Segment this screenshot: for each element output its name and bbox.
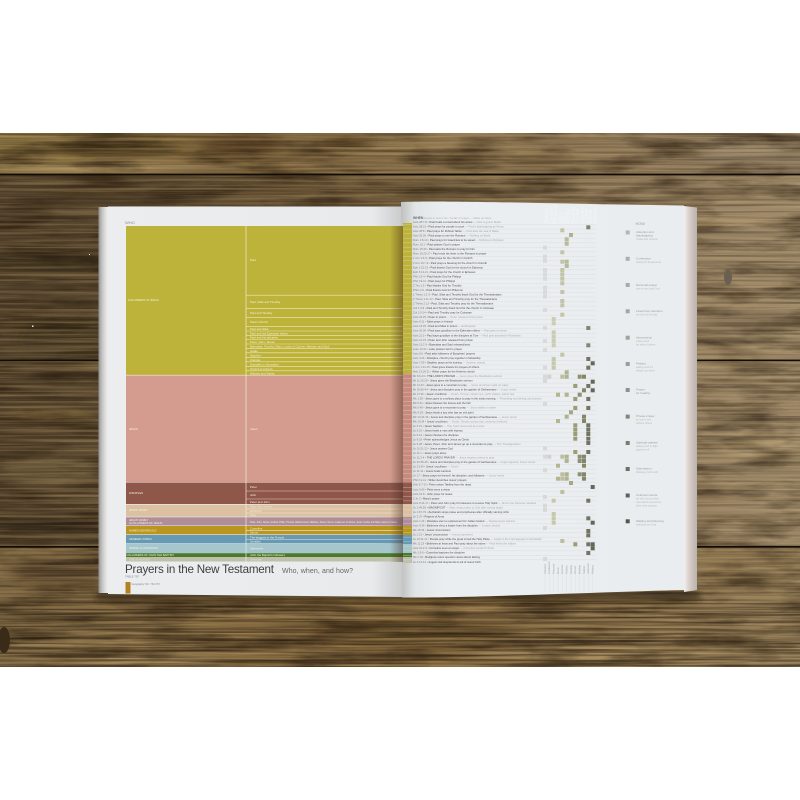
faint column headings: Private <box>575 208 581 224</box>
list rows: Acts 16:25 • Paul and Silas in prison — Earthquake <box>413 324 476 328</box>
faint column headings: Petition <box>566 207 572 224</box>
faint column headings: Fixed <box>558 212 564 224</box>
list rows: Lk 11:2-4 • THE LORD'S PRAYER — Jesus teaches others to pray <box>413 456 495 460</box>
faint column headings: Healing <box>571 207 577 224</box>
knot: right <box>724 269 732 285</box>
band: named individuals <box>126 526 403 534</box>
person labels: Sanhedrin <box>250 546 264 550</box>
faint column headings: Confess <box>549 205 555 224</box>
person labels: Unknown <box>250 557 262 561</box>
list rows: Jn 11:41 • Jesus heals Lazarus <box>413 469 452 473</box>
panel: when list <box>403 216 596 564</box>
person labels: Peter, John, James <box>250 340 275 344</box>
category labels: JESUS <box>129 427 138 431</box>
list rows: Acts 20:36 • Paul prays to see the Romans — Nothing on Earth <box>413 234 491 238</box>
person labels: Barnabas, Timothy, Mary, Lucius of Cyrene, Manaen and Saul <box>250 344 330 348</box>
person labels: Peter, John, James, Andrew, Philip, Thomas, Bartholomew, Matthew, James, Simon, Judas son of James, Jesus' mother and Mary, sisters of Jesus <box>250 520 397 524</box>
legend item: fixed-hour: set time of the day <box>636 312 658 316</box>
list rows: Mt 27:46 • Jesus' crucifixion — Death, Temple curtain rips, earth shakes, saints rise <box>413 392 515 396</box>
list rows: Lk 6:12 • Jesus chooses the disciples <box>413 433 459 437</box>
list rows: Lk 23:34 • Jesus' crucifixion — Death <box>413 465 459 469</box>
legend item: intercession <box>626 336 656 346</box>
list rows: Acts 28:15 • Paul prays for people in court — Paul's thanksgiving by Rome <box>413 224 504 228</box>
list rows: Lk 2:21 • Jesus' circumcision — Anna prophesies <box>413 533 474 537</box>
band: general public <box>126 535 403 543</box>
legend item: prayer for healing <box>626 388 650 395</box>
bottom plank grain <box>0 600 800 667</box>
list rows: Lk 10:21-22 • Jesus praises God <box>413 446 453 450</box>
left cover edge <box>98 207 108 593</box>
faint column headings: Personal <box>553 204 559 224</box>
list rows: Acts 6:6 • Paul asks followers of Epaphras' prayers <box>413 351 476 355</box>
list rows: Acts 8:14-17 • Peter and John pray for believers to receive Holy Spirit — Simon the Sorcerer rebuked <box>413 501 537 505</box>
rotated column labels: Fixed <box>556 567 560 574</box>
list rows <box>413 220 542 564</box>
list rows: Heb 13:18-21 • Writer prays for the Hebrew church <box>413 370 475 374</box>
list rows: Mk 11:25 • Believers at feast and Paul pray about the storm — Paul feeds the sailors <box>413 542 517 546</box>
legend item: unknown words: they were praying <box>636 504 657 508</box>
legend item: prayer for healing: for healing <box>636 391 650 395</box>
person labels: Paul and Timothy <box>250 311 273 315</box>
list rows: Phil 1:3-4 • Paul thanks God for Philippi <box>413 274 461 278</box>
band: Jesus' family <box>126 505 403 517</box>
legend item: unknown words: was said but we know <box>636 500 661 504</box>
list rows: Acts 14:23 • Peter and John released from prison <box>413 338 473 342</box>
list rows: Jn 17 • Jesus prays for himself, his disciples, and followers — Jesus' arrest <box>413 474 504 478</box>
person labels: Paul and his disciples <box>250 336 278 340</box>
faint column headings: Interc. <box>562 210 568 224</box>
legend item: submission: Submission <box>636 466 652 470</box>
list rows: Mk 14:32-39 • Jesus and disciples pray in the garden of Gethsemane — Jesus' arrest <box>413 415 517 419</box>
list rows: Lk 3:21 • Jesus' baptism — Holy Spirit descends as a dove <box>413 424 485 428</box>
legend item: private prayer: Private prayer <box>636 414 655 418</box>
legend item: confession: Confession <box>636 256 651 260</box>
legend item: confession <box>626 256 662 264</box>
list rows: Rom 15:30 • Paul asks the Romans to pray for him <box>413 247 476 251</box>
legend item: unknown words: Unknown words <box>636 493 658 497</box>
list rows: Acts 28:7-8 • Paul heals a crowd about his arrest — Paul is god in Malta <box>413 220 501 224</box>
list rows: Mt 14:23 • Jesus goes to a mountain to pray — Jesus and Peter walk on water <box>413 383 509 387</box>
right cover edge <box>684 206 697 592</box>
faint column headings: Submit <box>584 208 590 224</box>
title: Prayers in the New Testament <box>125 563 275 576</box>
legend item: petition <box>626 362 655 372</box>
colour strip matching who bands <box>403 223 412 563</box>
legend item: spiritual warfare: against evil <box>636 448 649 452</box>
person labels: Peter <box>250 485 257 489</box>
list rows: Acts 13:2-3 • Barnabas and Saul released/sent <box>413 342 470 346</box>
wood specks <box>32 254 90 327</box>
list rows: Phil 1:9-11 • Paul prays for Philippi <box>413 279 455 283</box>
list rows: 1 Thess 1:2-3 • Paul, Silas and Timothy thank God for the Thessalonians <box>413 292 502 296</box>
upper matrix squares <box>543 225 590 357</box>
list rows: Lk 2:37 • Prayers of Anna <box>413 514 445 518</box>
list rows: 2 Tim 1:3 • Paul thanks God for Timothy <box>413 283 462 287</box>
legend item: attention and thanksgiving: Attention and <box>636 230 654 234</box>
legend item: petition: asking God for <box>636 365 653 369</box>
category labels: NAMED INDIVIDUALS <box>129 528 157 532</box>
person labels: Paul <box>250 258 256 262</box>
legend item: waiting and listening: hearing from God <box>636 522 657 526</box>
category labels: ONE IN HEAVEN <box>129 557 150 561</box>
rotated column labels <box>543 560 594 574</box>
list rows: Acts 1:24 • Disciples elect a replacement for Judas Iscariot — Replacement elected <box>413 519 515 523</box>
person labels: Paul and the Ephesian elders <box>250 331 288 335</box>
list rows: Mk 2:18 • Religious rulers question Jesus about fasting <box>413 555 480 559</box>
rotated column labels: Healing <box>569 565 573 574</box>
legend item: intercession: for help of others <box>636 342 656 346</box>
heading: how: HOW <box>636 222 645 226</box>
wood stains <box>0 137 800 664</box>
band: unknown <box>126 557 403 562</box>
band: family and followers <box>126 517 403 526</box>
wood blotches <box>0 133 800 667</box>
rotated column labels: Private <box>573 565 577 574</box>
legend item: spiritual warfare <box>626 440 658 452</box>
rotated column labels: Interces. <box>560 564 564 574</box>
list rows: Acts 16:25 • Peter in prison — Peter released from prison <box>413 315 483 319</box>
band: Jewish authorities <box>126 544 403 553</box>
person labels: Disciples in Jerusalem <box>250 362 279 366</box>
person labels <box>250 258 397 561</box>
category labels: GENERAL PUBLIC <box>129 537 152 541</box>
list rows: Lk 1:67-79 • Zechariah sings praise and prophesies after officially naming John <box>413 510 509 514</box>
list rows: Col 1:9-14 • Paul and Timothy pray for Colossae <box>413 311 472 315</box>
list rows: Acts 10:2-3 • Cornelius sees an angel — Cornelius sends for Peter <box>413 546 494 550</box>
list rows: Rom 1:8-10 • Paul prays for Israel/Jew to be saved — Nothing on Romans <box>413 238 504 242</box>
legend item: attention and thanksgiving: praise and worship <box>636 237 658 241</box>
list rows: Eph 3:14-21 • Paul prays for the church in Ephesus <box>413 270 476 274</box>
category labels: FOLLOWERS OF JESUS <box>128 298 159 302</box>
list rows: Rom 16:25-27 • Paul ends his letter to the Romans in prayer <box>413 252 487 256</box>
row rules <box>413 224 596 564</box>
legend item: intercession: asking God <box>636 339 650 343</box>
faint column headings: Warfare <box>580 206 586 224</box>
list rows: Acts 21:5 • Paul says goodbye to the disciples at Tyre — Paul gets arrested in Ptolemais <box>413 333 521 337</box>
lower matrix squares <box>543 357 595 561</box>
list rows: Acts 28:8 • Paul prays for Publius' father — Paul asks the sea of Malta <box>413 229 499 233</box>
panel: who chart <box>125 220 403 562</box>
list rows: 2 Thess 1:11-12 • Paul, Silas and Timothy pray for the Thessalonians <box>413 297 498 301</box>
person labels: Mary and Joseph <box>250 504 273 508</box>
legend item: submission <box>626 466 658 474</box>
person labels: Paul's Church <box>250 320 268 324</box>
list rows: Mt 26:36-44 • Jesus and disciples pray in the garden of Gethsemane — Jesus' arrest <box>413 388 517 392</box>
heading: who: WHO <box>125 220 135 225</box>
gutter shading on chart <box>390 226 403 562</box>
open book <box>98 201 697 598</box>
legend item: unknown words <box>626 493 661 508</box>
faint column headings <box>544 204 599 224</box>
orange page tab <box>126 582 130 594</box>
list rows: Heb 5:7-10 • Peter raises Tabitha from the dead <box>413 483 472 487</box>
list rows: Phlm 4-6 • Paul thanks God for Philemon <box>413 288 464 292</box>
list rows: Lk 9:18 • Peter acknowledges Jesus as Christ <box>413 437 469 441</box>
subtitle: Who, when, and how? <box>282 568 353 575</box>
panel: how legend <box>626 222 664 526</box>
category labels: & FOLLOWERS OF JESUS <box>129 521 163 525</box>
rotated column labels: Attention <box>543 563 547 574</box>
person labels: Peter and John <box>250 500 270 504</box>
person labels: Jesus <box>250 427 258 431</box>
category labels: FOLLOWERS OF JOHN THE BAPTIST <box>126 553 174 557</box>
rotated column labels: Waiting <box>590 565 594 574</box>
list rows: Lk 1:46-55 • MAGNIFICAT — Mary sings praise to God after seeing angel <box>413 505 503 509</box>
list rows: Acts 10:9 • John prays for Gaius <box>413 492 453 496</box>
wood grain texture <box>0 133 800 667</box>
left page <box>108 206 402 597</box>
book shadow <box>96 592 700 605</box>
list rows: Mk 15:34 • Jesus' circumcision <box>413 528 451 532</box>
legend item: personal prayer <box>626 283 660 290</box>
list rows: Mk 15:34 • Jesus' crucifixion — Death, Temple curtain rips, centurion believes <box>413 419 508 423</box>
knot: lower left <box>0 627 10 653</box>
legend item: fixed-hour <box>626 309 663 316</box>
table reference: TABLE 787 <box>125 574 140 578</box>
legend item: waiting and listening: Waiting and listening <box>636 519 664 523</box>
person labels: Stephen <box>250 353 261 357</box>
list rows: Mt 11:25-26 • Jesus gives the Beatitudes sermon <box>413 379 473 383</box>
person labels: John <box>250 493 257 497</box>
category labels: JESUS' FAMILY <box>129 518 148 522</box>
band: disciples <box>126 482 403 504</box>
person labels: Elizabeth <box>250 509 262 513</box>
person labels: Mary <box>250 513 257 517</box>
legend item: unknown words: we don't know what <box>636 496 659 500</box>
wood light grain <box>0 133 800 667</box>
list rows: 2 Thess 2:13 • Paul, Silas and Timothy pray for the Thessalonians <box>413 302 494 306</box>
legend item: intercession: Intercession <box>636 336 653 340</box>
legend item: spiritual warfare: asking God to fight <box>636 444 658 448</box>
legend item: personal prayer: Personal prayer <box>636 283 657 287</box>
list rows: Acts 4:24 • Believers elect a leader from the disciples — Leader elected <box>413 524 501 528</box>
legend item: confession: asking for forgiveness <box>636 260 662 264</box>
legend item: private prayer: on one's own <box>636 418 652 422</box>
list rows: Eph 1:15-23 • Paul thanks God for the church in Ephesus <box>413 265 483 269</box>
panel: how matrix <box>543 204 599 592</box>
list rows: 1 Cor 1:14-15 • Paul gives thanks for prayers of others <box>413 365 480 369</box>
rotated column labels: Personal <box>552 563 556 574</box>
category labels: DISCIPLES <box>129 491 143 495</box>
legend item: petition: things you need <box>636 368 655 372</box>
list rows: Mk 6:46 • Jesus goes to a mountain to pray — Jesus walks on water <box>413 406 496 410</box>
band: Jesus <box>126 376 403 482</box>
category labels <box>126 298 174 561</box>
plank: bottom <box>0 547 800 667</box>
list rows: Acts 20:36 • Paul says goodbye to the Ephesian elders — Paul gets no sleep <box>413 329 507 333</box>
plank seams <box>0 174 800 548</box>
list rows: Acts 4:24 • Disciples, church pray together in fellowship <box>413 356 481 360</box>
person labels: Gentiles <box>250 540 261 544</box>
list rows: Acts 9:11 • Saint prays in Antioch <box>413 320 454 324</box>
list rows: 2 Cor 13:7-9 • Paul prays a blessing for the church in Corinth <box>413 261 488 265</box>
list rows: Mk 1:5-6 • Cornelius baptizes the disciples <box>413 551 465 555</box>
list rows: Mk 1:35 • Jesus goes to a solitary place to pray in the early morning — Preaching and driving out demons <box>413 397 542 401</box>
list rows: Lk 2:13-14 • Angels visit shepherds to tell of Jesus' birth <box>413 560 481 564</box>
faint column headings: Thanks <box>544 207 550 224</box>
rotated column labels: Confession <box>547 560 551 574</box>
column divider and subdivisions <box>126 226 403 562</box>
list rows: Mk 9:29 • Jesus heals a boy who has an evil spirit <box>413 410 474 414</box>
list rows: Lk 9:28 • Jesus, Peter, John and James go up a mountain to pray — The Transfiguration <box>413 442 521 446</box>
person labels: Judas <box>250 349 258 353</box>
list rows: Phil 2:1-11 • Writer describes Jesus' prayers <box>413 478 467 482</box>
band: followers of Jesus <box>126 226 403 375</box>
legend item: fixed-hour: Fixed-hour devotion <box>636 309 663 313</box>
legend item: attention and thanksgiving <box>626 230 658 241</box>
person labels: John the Baptist's followers <box>250 553 285 557</box>
list rows: Acts 7:59 • Stephen prays at his stoning — Stephen stoned <box>413 360 486 364</box>
rotated column labels: Submit <box>582 566 586 574</box>
category labels: JESUS' FAMILY <box>129 508 148 512</box>
list rows: Luke 10:21 • Luke praises God in prayer <box>413 347 462 351</box>
rotated column labels: Unknown <box>586 563 590 574</box>
rotated column labels: Petition <box>564 565 568 574</box>
list rows: Lk 5:16 • Jesus heals a man with leprosy <box>413 428 463 432</box>
plank: top <box>0 133 800 174</box>
list rows: Mk 6:41 • Jesus blesses the loaves and the fish <box>413 401 471 405</box>
faint column headings: Words <box>588 209 594 224</box>
person labels: The beggars in the Temple <box>250 536 285 540</box>
tab caption: Geography NO. 764-767 <box>132 582 160 586</box>
wood table background <box>0 133 800 667</box>
person labels: Cornelius <box>250 526 263 530</box>
category labels: JEWISH AUTHORITIES <box>129 546 158 550</box>
list rows: Rom 10:1 • Paul praises God in prayer <box>413 243 460 247</box>
person labels: Widows and Saints <box>250 371 275 375</box>
legend item: private prayer <box>626 414 655 425</box>
legend item: attention and thanksgiving: thanksgiving <box>636 234 653 238</box>
legend item: prayer for healing: Prayer <box>636 388 645 392</box>
list rows: Lk 18:11-13 • People pray while the great crowd the Holy Place — Angel of the Lord appears to Zechariah <box>413 537 542 541</box>
column guide lines <box>545 565 593 592</box>
right page <box>401 201 684 598</box>
list rows: Acts 9:40 • Peter sees a vision <box>413 487 451 491</box>
legend item: personal prayer: one-to-one with God <box>636 286 660 290</box>
person labels: Simon <box>250 530 259 534</box>
legend item: private prayer: without others <box>636 421 653 425</box>
person labels: Paul, Silas and Timothy <box>250 300 281 304</box>
list rows: Mt 6:9-13 • THE LORD'S PRAYER — Jesus gives the Beatitudes sermon <box>413 374 503 378</box>
legend item: petition: Petition <box>636 362 646 366</box>
list rows: Lk 11:1 • Jesus prays alone <box>413 451 447 455</box>
person labels: Paul and Silas <box>250 327 269 331</box>
person labels: Church in Antioch <box>250 367 273 371</box>
person labels: Ananias <box>250 358 261 362</box>
rotated column labels: Warfare <box>578 564 582 574</box>
band: followers of John the Baptist <box>126 553 403 557</box>
heading: when: WHEN Events in Jesus' life • breath of prayer — follow up notes <box>413 216 492 220</box>
list rows: 3 Jn 2 • Mary's prayer <box>413 496 440 500</box>
list rows: 1 Cor 1:4-9 • Paul prays for the church in Corinth <box>413 256 473 260</box>
legend item: submission: following God's will <box>636 470 658 474</box>
faint column headings: Waiting <box>593 207 599 224</box>
legend item: spiritual warfare: Spiritual warfare <box>636 440 658 444</box>
legend item: waiting and listening <box>626 519 664 526</box>
list rows: Col 1:3-8 • Paul and Timothy thank God for the church in Colossae <box>413 306 495 310</box>
list rows: Lk 22:39-46 • Jesus and disciples pray in the garden of Gethsemane — Angel appears, Jesus' arrest <box>413 460 536 464</box>
